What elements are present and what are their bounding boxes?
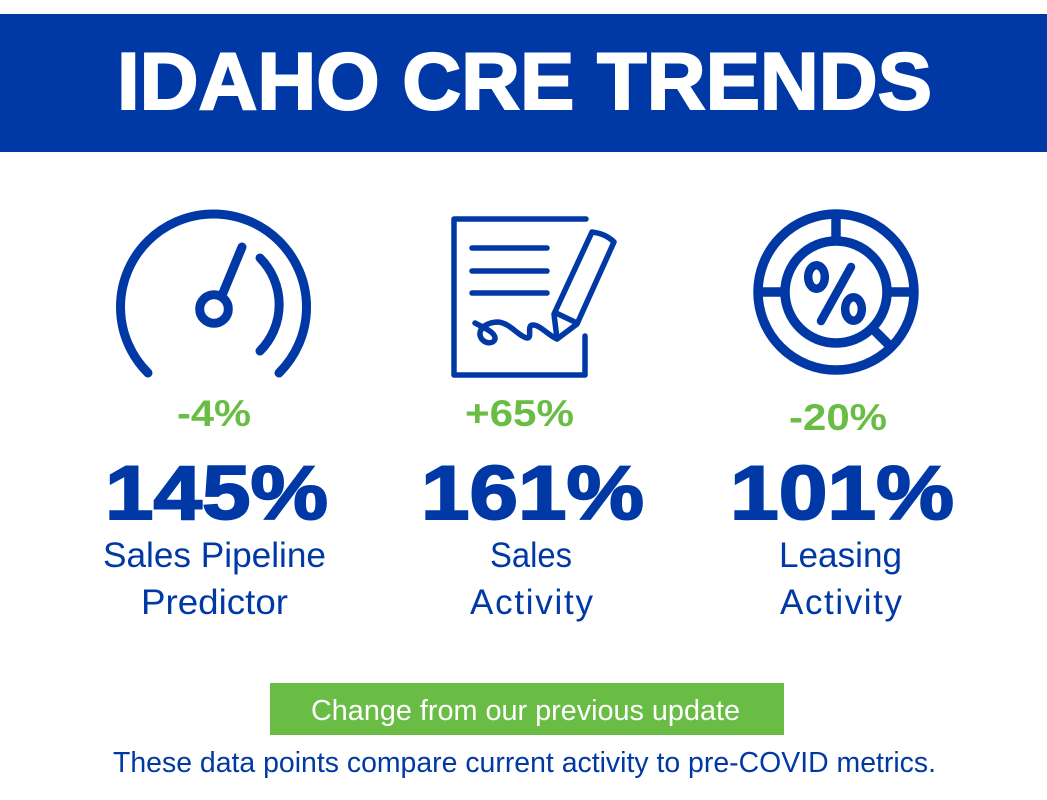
column: sales activity bbox=[421, 219, 644, 622]
footnote: These data points compare current activity to pre-COVID metrics. bbox=[113, 747, 936, 779]
change value: -20% bbox=[789, 397, 887, 438]
label bbox=[103, 536, 326, 622]
title: IDAHO CRE TRENDS bbox=[117, 37, 932, 127]
title banner bbox=[0, 14, 1047, 152]
column: leasing activity bbox=[730, 214, 954, 622]
label bbox=[779, 536, 902, 622]
legend: green key bbox=[270, 683, 784, 735]
legend: green key: Change from our previous update bbox=[311, 695, 740, 727]
column: sales pipeline predictor bbox=[103, 214, 328, 622]
label: Sales Pipeline bbox=[103, 536, 326, 575]
icon: signed document bbox=[454, 219, 614, 375]
main percentage: 101% bbox=[730, 451, 954, 536]
label: Activity bbox=[470, 583, 594, 622]
label: Activity bbox=[780, 583, 902, 622]
main percentage: 161% bbox=[421, 451, 644, 536]
label: Sales bbox=[490, 536, 572, 575]
label: Predictor bbox=[141, 583, 288, 622]
label bbox=[470, 536, 594, 622]
main percentage: 145% bbox=[105, 451, 328, 536]
label: Leasing bbox=[779, 536, 902, 575]
icon: percent dial bbox=[758, 214, 914, 370]
change value: -4% bbox=[177, 393, 251, 434]
icon: speedometer gauge bbox=[120, 214, 306, 373]
change value: +65% bbox=[465, 393, 574, 434]
